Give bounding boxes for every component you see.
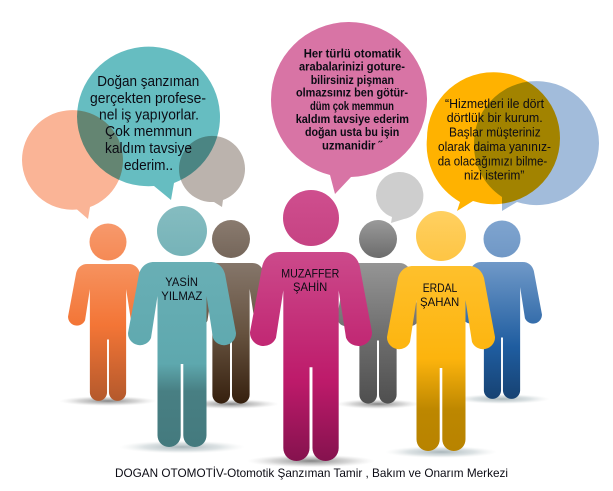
text: yellow bubble testimonial: “Hizmetleri ile dört: [445, 97, 545, 111]
figure: orange person: [59, 224, 157, 406]
figure: grey person: [336, 220, 420, 409]
label: Erdal Şahan: ERDAL: [423, 281, 458, 295]
label: Muzaffer Şahin: [281, 266, 340, 294]
text: pink bubble testimonial: arabalarinizi goture-: [299, 62, 405, 74]
bubble: light grey speech: [376, 172, 423, 223]
text: pink bubble testimonial: uzmanidir ˝: [322, 140, 383, 152]
bubble: pink testimonial: [271, 22, 427, 194]
label: Yasin Yılmaz: YASİN: [165, 275, 198, 289]
text: pink bubble testimonial: bilirsiniz pişman: [311, 75, 394, 87]
text: yellow bubble testimonial: da olacağımızı bilme-: [438, 154, 547, 168]
text: teal bubble testimonial: ederim..: [124, 158, 173, 174]
label: Erdal Şahan: [420, 281, 459, 309]
text: yellow bubble testimonial: Başlar müşteriniz: [449, 126, 541, 140]
text: teal bubble testimonial: Çok memmun: [105, 124, 192, 140]
bubble: taupe speech: [179, 136, 245, 207]
label: Erdal Şahan: ŞAHAN: [420, 295, 459, 309]
text: yellow bubble testimonial: [438, 97, 551, 182]
text: teal bubble testimonial: [90, 74, 206, 174]
label: Yasin Yılmaz: [161, 275, 202, 303]
label: Muzaffer Şahin: ŞAHİN: [293, 280, 327, 294]
bubble: yellow testimonial: [427, 72, 560, 211]
label: Muzaffer Şahin: MUZAFFER: [281, 266, 340, 280]
label: Yasin Yılmaz: YILMAZ: [161, 289, 202, 303]
text: teal bubble testimonial: gerçekten profese-: [90, 91, 206, 107]
text: teal bubble testimonial: nel iş yapıyorlar.: [99, 108, 199, 124]
figure: teal person, Yasin Yılmaz: [119, 206, 245, 454]
text: pink bubble testimonial: [296, 48, 409, 152]
text: pink bubble testimonial: Her türlü otomatik: [304, 48, 402, 60]
text: teal bubble testimonial: Doğan şanzıman: [97, 74, 199, 90]
figure: magenta person, Muzaffer Şahin: [247, 190, 375, 468]
text: yellow bubble testimonial: olarak daima yanınız-: [438, 140, 551, 154]
text: pink bubble testimonial: doğan usta bu işin: [305, 127, 399, 139]
bubble: teal testimonial: [77, 47, 220, 200]
text: pink bubble testimonial: olmazsınız ben götür-: [296, 88, 408, 100]
text: yellow bubble testimonial: nizi isterim”: [464, 168, 524, 182]
bubble: blue speech: [474, 81, 599, 211]
text: pink bubble testimonial: düm çok memmun: [310, 101, 394, 113]
text: pink bubble testimonial: kaldım tavsiye ederim: [296, 114, 409, 126]
text: teal bubble testimonial: kaldım tavsiye: [105, 141, 192, 157]
figure: brown person: [183, 220, 279, 409]
text: yellow bubble testimonial: dörtlük bir kurum.: [447, 111, 543, 125]
figure: yellow person, Erdal Şahan: [385, 211, 497, 458]
figure: blue person: [454, 220, 550, 404]
footer caption: DOGAN OTOMOTİV-Otomotik Şanzıman Tamir , Bakım ve Onarım Merkezi: [115, 466, 508, 480]
bubble: orange speech: [22, 110, 123, 219]
